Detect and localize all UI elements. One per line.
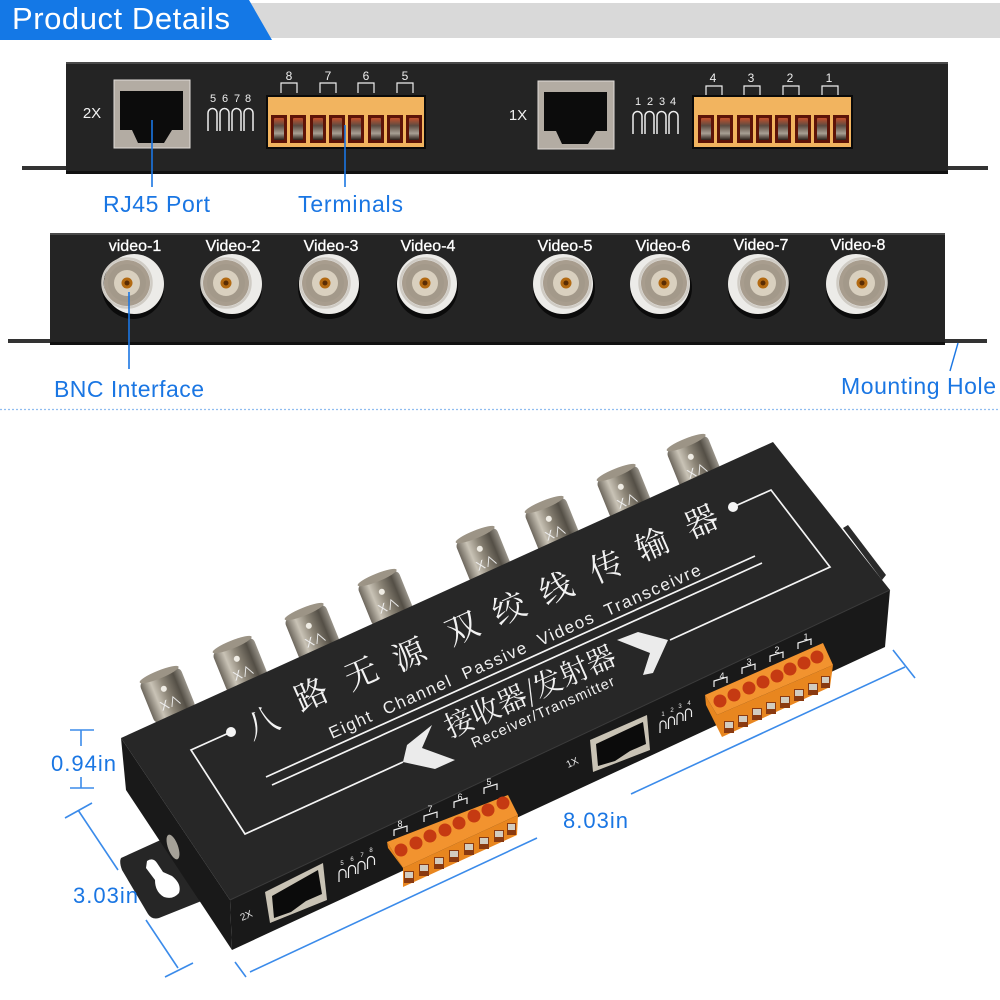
Chinese product name: 输 <box>627 514 676 571</box>
Chinese product name: 源 <box>384 624 434 681</box>
border dots <box>226 502 738 737</box>
dimension: height <box>70 730 94 788</box>
dimension text: 3.03in: 3.03in <box>73 883 138 908</box>
port label 2X: 2X <box>83 105 101 122</box>
callout line: RJ45 Port <box>151 120 153 187</box>
channel brackets 4 3 2 1: 4 <box>710 71 717 85</box>
English product name: Eight Channel Passive Videos Transceivre <box>326 561 704 743</box>
channel brackets 8 7 6 5 <box>281 69 413 93</box>
label 1X: 1X <box>565 756 581 771</box>
pin diagram 1234: 3 <box>659 96 665 108</box>
pin diagram 5678: 5 <box>210 93 216 105</box>
top face <box>121 442 890 900</box>
callout line: Mounting Hole <box>950 343 958 371</box>
dimension: width <box>65 803 193 977</box>
pin diagram 1234: 4 <box>670 96 676 108</box>
label: Terminals: Terminals <box>298 191 403 217</box>
pin diagram 1234 <box>633 96 678 134</box>
pin diagram 1234 angled: 2 <box>670 708 674 714</box>
channel marks 8 7 6 5 angled: 5 <box>486 777 492 787</box>
printed border <box>191 490 830 834</box>
pin diagram 1234 angled: 3 <box>678 704 682 710</box>
panel: RJ45 and terminal side <box>22 62 988 174</box>
panel: BNC side <box>8 233 987 345</box>
callout line: Terminals <box>344 125 346 187</box>
channel brackets 8 7 6 5: 5 <box>402 69 409 83</box>
channel marks 4 3 2 1 angled: 3 <box>746 657 752 667</box>
header background bar <box>250 3 1000 38</box>
Chinese product name: 无 <box>336 643 385 700</box>
channel marks 4 3 2 1 angled: 2 <box>774 645 780 655</box>
channel marks 4 3 2 1 angled: 1 <box>803 632 809 642</box>
RJ45 port 2X angled <box>265 863 327 923</box>
terminal block angled 8-5 <box>387 795 518 887</box>
pin diagram 1234 angled: 1 <box>661 712 665 718</box>
channel brackets 4 3 2 1: 3 <box>748 71 755 85</box>
RJ45 port 1X angled <box>590 715 650 772</box>
receiver transmitter English: Receiver/Transmitter <box>469 674 617 752</box>
video labels: Video-8 <box>831 237 886 254</box>
pin diagram 1234 angled: 4 <box>687 701 691 707</box>
port label 1X: 1X <box>509 107 527 124</box>
channel marks 4 3 2 1 angled <box>714 632 811 687</box>
dimension: length <box>235 650 915 977</box>
Chinese product name: 路 <box>286 664 335 721</box>
channel marks 8 7 6 5 angled: 7 <box>427 804 433 814</box>
label: RJ45 Port: RJ45 Port <box>103 191 211 217</box>
video labels: Video-2 <box>206 238 261 255</box>
channel marks 8 7 6 5 angled: 6 <box>457 792 463 802</box>
Chinese product name <box>237 491 725 749</box>
pin diagram 5678: 6 <box>222 93 228 105</box>
video labels: Video-6 <box>636 238 691 255</box>
dimension text: 0.94in: 0.94in <box>51 751 116 776</box>
device photo: angled view <box>120 431 890 950</box>
terminal block angled 4-1 <box>705 643 833 737</box>
video labels: Video-4 <box>401 238 456 255</box>
section divider <box>0 408 1000 410</box>
dimension text: 8.03in: 8.03in <box>563 808 628 833</box>
video labels: Video-7 <box>734 237 789 254</box>
label 2X: 2X <box>239 909 255 924</box>
pin diagram 5678 angled: 7 <box>360 853 364 859</box>
channel brackets 4 3 2 1 <box>706 71 838 95</box>
pin diagram 5678 angled: 5 <box>340 861 344 867</box>
video labels: Video-5 <box>538 238 593 255</box>
terminal block 4-1 <box>692 95 853 149</box>
title: Product Details <box>12 1 230 36</box>
video labels: video-1 <box>109 238 161 255</box>
pin diagram 1234 angled <box>660 701 692 733</box>
pin diagram 5678 angled <box>339 848 374 882</box>
arrow left <box>403 725 455 769</box>
receiver transmitter Chinese: 接收器/发射器 <box>437 634 622 746</box>
label: BNC Interface: BNC Interface <box>54 376 204 402</box>
left end face <box>121 738 232 950</box>
video labels: Video-3 <box>304 238 359 255</box>
callout line: BNC Interface <box>128 292 130 369</box>
front edge highlight <box>230 590 890 900</box>
Chinese product name: 双 <box>437 598 486 655</box>
channel brackets 4 3 2 1: 2 <box>787 71 794 85</box>
pin diagram 5678 <box>208 93 253 131</box>
BNC barrels <box>137 431 725 727</box>
mounting tab <box>120 838 204 918</box>
Chinese product name: 器 <box>676 491 725 548</box>
channel brackets 8 7 6 5: 6 <box>363 69 370 83</box>
video labels <box>109 237 886 255</box>
channel brackets 8 7 6 5: 7 <box>325 69 332 83</box>
printed double lines <box>266 556 762 785</box>
rear lip <box>843 525 886 580</box>
pin diagram 5678: 7 <box>234 93 240 105</box>
front face <box>230 590 890 950</box>
pin diagram 5678 angled: 6 <box>350 857 354 863</box>
RJ45 port 1X <box>538 81 614 149</box>
screw <box>164 833 182 861</box>
channel marks 8 7 6 5 angled: 8 <box>397 819 403 829</box>
label: Mounting Hole: Mounting Hole <box>841 373 996 399</box>
terminal block 8-5 <box>266 95 426 149</box>
Chinese product name: 传 <box>581 536 630 593</box>
pin diagram 1234: 1 <box>635 96 641 108</box>
header tab <box>0 0 272 40</box>
Chinese product name: 线 <box>531 558 580 615</box>
pin diagram 5678 angled: 8 <box>369 848 373 854</box>
pin diagram 5678: 8 <box>245 93 251 105</box>
channel marks 8 7 6 5 angled <box>394 777 497 836</box>
arrow right <box>617 632 668 675</box>
mounting slot <box>146 859 180 898</box>
channel brackets 8 7 6 5: 8 <box>286 69 293 83</box>
BNC connectors <box>102 254 888 319</box>
channel brackets 4 3 2 1: 1 <box>826 71 833 85</box>
channel marks 4 3 2 1 angled: 4 <box>719 671 725 681</box>
Chinese product name: 绞 <box>484 578 534 635</box>
RJ45 port 2X <box>114 80 190 148</box>
Chinese product name: 八 <box>237 692 286 749</box>
pin diagram 1234: 2 <box>647 96 653 108</box>
